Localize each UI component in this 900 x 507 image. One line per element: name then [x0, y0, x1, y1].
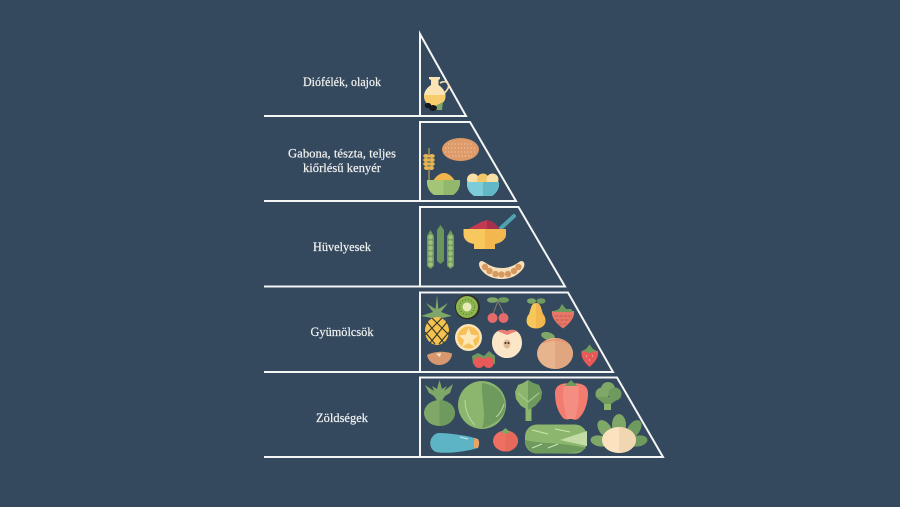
icon: pineapple: [421, 295, 452, 345]
icon: mandarin slice: [427, 352, 452, 365]
icon: wheat stalk: [423, 148, 435, 180]
label: grains: Gabona, tészta, teljes: [288, 146, 396, 160]
icon: green bowl of grain: [427, 173, 460, 195]
icon: pear: [527, 298, 546, 328]
icon: peach: [537, 331, 573, 369]
icon: two berries with leaves: [472, 351, 495, 368]
icon: kohlrabi: [424, 380, 455, 426]
icon: apple half: [492, 330, 522, 358]
icon: kiwi: [455, 294, 480, 320]
icon: oil jug with olives: [424, 77, 449, 111]
label: grains: kiőrlésű kenyér: [303, 160, 382, 175]
icon: cabbage: [458, 381, 506, 429]
label: grains: [288, 146, 396, 175]
icon: tomato: [493, 428, 518, 452]
icon: cherries: [487, 297, 509, 323]
icon: bean pod: [479, 261, 524, 279]
label: vegetables: Zöldségek: [316, 410, 368, 425]
icon: spoon: [501, 216, 514, 228]
pyramid tier 1 outline: [264, 34, 466, 116]
icon: napa cabbage: [525, 424, 587, 454]
icon: artichoke: [515, 380, 542, 421]
pyramid tier 3 outline: [264, 207, 565, 286]
icon: orange slice: [455, 324, 482, 351]
label: nuts and oils: Diófélék, olajok: [303, 74, 381, 89]
pyramid tier 4 outline: [264, 292, 613, 372]
pyramid tier 2 outline: [264, 122, 516, 201]
icon: pea pods: [427, 225, 454, 269]
label: fruits: Gyümölcsök: [310, 324, 374, 339]
label: legumes: Hüvelyesek: [313, 239, 371, 254]
pyramid tier 5 outline: [264, 378, 663, 457]
icon: broccoli: [596, 382, 622, 410]
icon: cauliflower: [590, 414, 648, 453]
icon: bread loaf: [442, 138, 479, 161]
icon: blue bowl with pasta: [467, 174, 499, 196]
icon: red pepper: [555, 380, 588, 420]
icon: strawberry lower right: [581, 344, 598, 367]
icon: zucchini: [430, 433, 479, 453]
icon: lentil bowl: [464, 220, 506, 249]
icon: strawberry upper right: [552, 304, 574, 328]
